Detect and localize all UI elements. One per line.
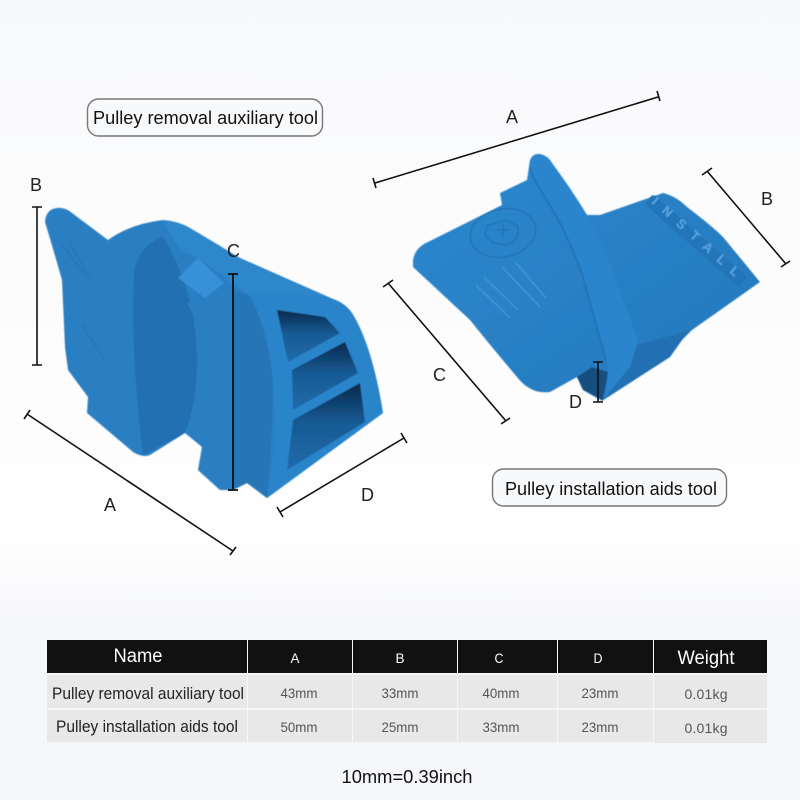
dimension B right xyxy=(702,168,790,267)
table row: removal tool: 40mm xyxy=(482,685,520,701)
tool window: top xyxy=(277,310,340,362)
dimension C right xyxy=(383,280,510,424)
embossed lines xyxy=(476,263,546,318)
removal tool photo xyxy=(45,208,383,498)
tool flange xyxy=(187,283,233,490)
table header xyxy=(47,640,767,673)
tool front face xyxy=(250,294,383,498)
logo emblem xyxy=(466,203,540,263)
label: installation tool: Pulley installation aids tool xyxy=(505,479,717,499)
table row: removal tool: 33mm xyxy=(382,685,418,701)
dimension A left xyxy=(24,410,236,555)
table row: removal tool: 0.01kg xyxy=(684,686,728,702)
table row: installation tool: 50mm xyxy=(280,719,318,735)
table row: removal tool: Pulley removal auxiliary tool xyxy=(52,684,244,703)
dimension D left xyxy=(277,433,407,517)
label: removal tool xyxy=(88,99,322,136)
text C left: C xyxy=(227,241,240,261)
table row: installation tool: 33mm xyxy=(482,719,520,735)
table row: installation tool: Pulley installation aids tool xyxy=(56,717,238,736)
tool ridge xyxy=(530,154,638,400)
table header: A xyxy=(290,650,300,666)
unit conversion note: 10mm=0.39inch xyxy=(342,767,472,787)
dimension B left xyxy=(32,207,42,365)
text C right: C xyxy=(433,365,446,385)
text D left: D xyxy=(361,485,374,505)
table header: C xyxy=(494,650,504,666)
table row: installation tool: 25mm xyxy=(382,719,418,735)
tool window: bottom xyxy=(287,383,365,470)
dimension C left xyxy=(228,274,238,490)
table row: installation tool xyxy=(47,710,767,743)
table header: Name xyxy=(114,646,162,667)
label: removal tool: Pulley removal auxiliary tool xyxy=(93,108,318,128)
tool flange tab xyxy=(178,258,224,298)
text B right: B xyxy=(761,189,773,209)
installation tool photo xyxy=(413,154,760,401)
table header: B xyxy=(396,650,404,666)
dimension A right xyxy=(373,91,660,188)
tool wall xyxy=(133,236,197,455)
text A right: A xyxy=(506,107,518,127)
text A left: A xyxy=(104,495,116,515)
tool window: middle xyxy=(292,342,358,410)
specification table xyxy=(47,640,767,743)
table header: Weight xyxy=(678,648,735,669)
label: installation tool xyxy=(492,469,726,506)
table header: D xyxy=(594,650,602,666)
table row: removal tool: 43mm xyxy=(280,685,318,701)
text B left: B xyxy=(30,175,42,195)
table row: installation tool: 0.01kg xyxy=(684,720,728,736)
text D right: D xyxy=(569,392,582,412)
table row: removal tool: 23mm xyxy=(582,685,618,701)
table row: installation tool: 23mm xyxy=(582,719,618,735)
install lettering: INSTALL xyxy=(649,194,743,279)
table row: removal tool xyxy=(47,675,767,708)
dimension D right xyxy=(593,362,603,402)
